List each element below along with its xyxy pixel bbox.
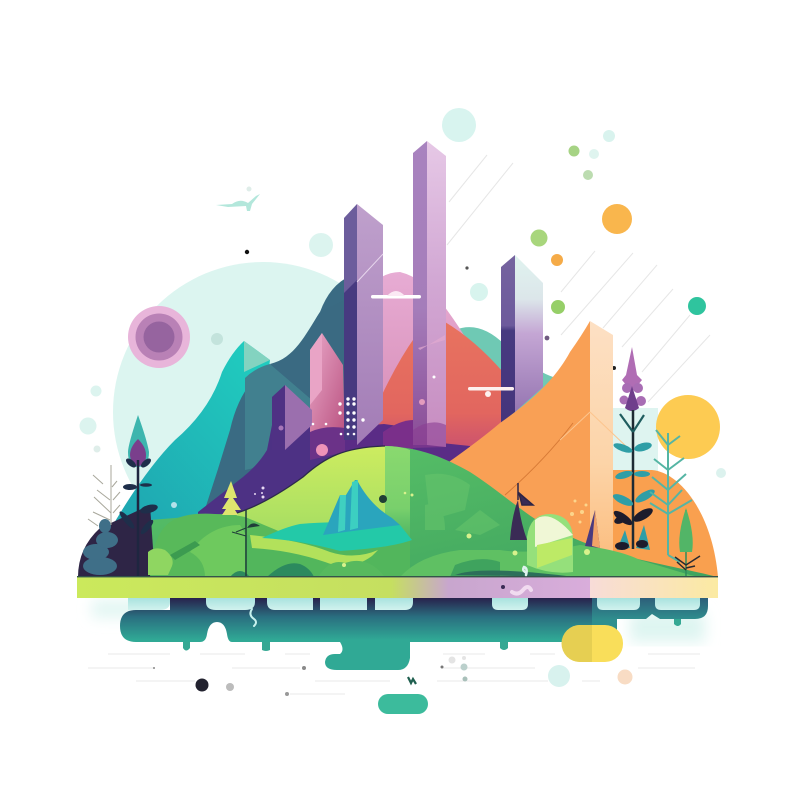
mid-ground greens below lake xyxy=(245,535,410,577)
pale panel behind trees xyxy=(613,408,658,488)
cloud bars xyxy=(371,291,514,397)
teal mountain xyxy=(110,341,270,530)
right foreground green xyxy=(400,545,700,577)
pale notches in water xyxy=(128,598,700,610)
yellow sun xyxy=(656,395,720,459)
small purple tower xyxy=(272,385,312,450)
pink hill xyxy=(370,272,470,420)
water body xyxy=(120,598,708,670)
purple base between towers xyxy=(383,420,413,452)
diagonal rain lines xyxy=(447,155,710,402)
white dots on towers xyxy=(278,376,436,456)
swirls xyxy=(250,567,531,626)
ground line xyxy=(77,576,718,577)
red mountain xyxy=(375,322,510,452)
band xyxy=(77,577,718,598)
hill pink-purple dots xyxy=(171,486,264,508)
dark cone left with flag xyxy=(510,483,533,540)
dark cone right xyxy=(585,510,600,548)
dark dot on band xyxy=(501,585,505,589)
purple lower slopes xyxy=(198,420,460,535)
yellow pine xyxy=(222,481,241,515)
magenta base xyxy=(310,427,345,460)
yellow pill xyxy=(562,625,623,662)
pink small tower xyxy=(310,333,345,440)
hill bumps xyxy=(230,561,385,577)
orange dots xyxy=(570,500,588,524)
foreground green mass xyxy=(148,514,300,577)
blue bush xyxy=(83,519,118,575)
tower tall centre xyxy=(413,141,446,448)
right tree spire xyxy=(620,347,646,549)
hill sparkle dots xyxy=(342,492,590,567)
lake xyxy=(262,522,412,551)
deep purple fill at tower bases xyxy=(340,424,478,478)
mini teal mountains xyxy=(323,480,400,535)
background pale circle xyxy=(113,262,413,562)
green hill xyxy=(150,446,717,577)
squiggle mark xyxy=(408,677,416,684)
small gray ends and dots xyxy=(153,656,632,696)
teal fern xyxy=(650,430,692,562)
teal mountain light facet xyxy=(244,341,270,372)
tower left xyxy=(344,204,383,445)
dark dot on hill xyxy=(379,495,387,503)
right hill patches xyxy=(425,474,500,535)
dark ground left xyxy=(78,505,155,577)
horizontal dash lines xyxy=(88,654,700,694)
hill thin tree xyxy=(232,510,260,577)
left gray tree xyxy=(88,465,120,526)
orange mountain xyxy=(440,321,718,578)
bird glyph xyxy=(216,186,260,211)
right tree leaves xyxy=(611,441,657,550)
soft glow under water xyxy=(92,600,705,642)
sun: pink target xyxy=(128,306,190,368)
tower right xyxy=(501,255,543,423)
small green fern xyxy=(675,508,700,577)
floating dots xyxy=(80,108,726,478)
dome arch xyxy=(527,514,573,573)
bottom pill xyxy=(378,694,428,714)
dark slate mountain xyxy=(198,276,372,530)
left tree xyxy=(118,415,159,577)
back teal hill xyxy=(455,327,556,420)
